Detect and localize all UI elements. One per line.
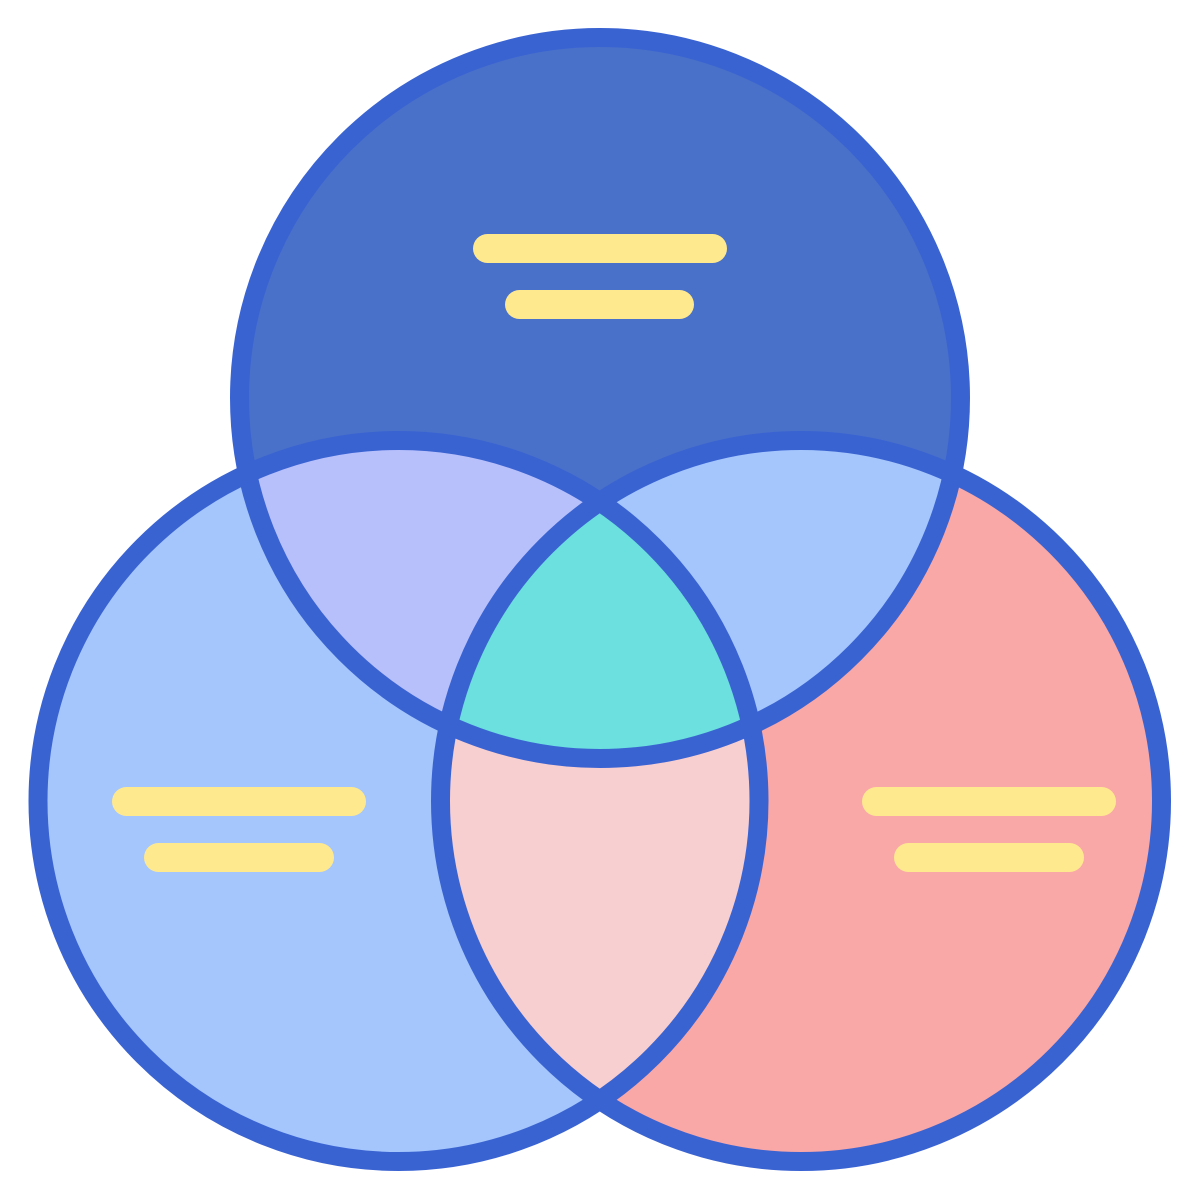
overlap: all three sets xyxy=(460,513,740,749)
text placeholder: top set xyxy=(473,234,727,319)
text placeholder: right set xyxy=(862,787,1116,872)
circle fill: right set xyxy=(440,440,1162,1162)
text placeholder: left set xyxy=(112,787,366,872)
overlap: top and right xyxy=(616,450,942,712)
overlap: top and left xyxy=(258,450,582,712)
circle fill: top set xyxy=(240,38,960,758)
circle fill: left set xyxy=(38,440,759,1162)
overlap: left and right xyxy=(450,738,750,1088)
